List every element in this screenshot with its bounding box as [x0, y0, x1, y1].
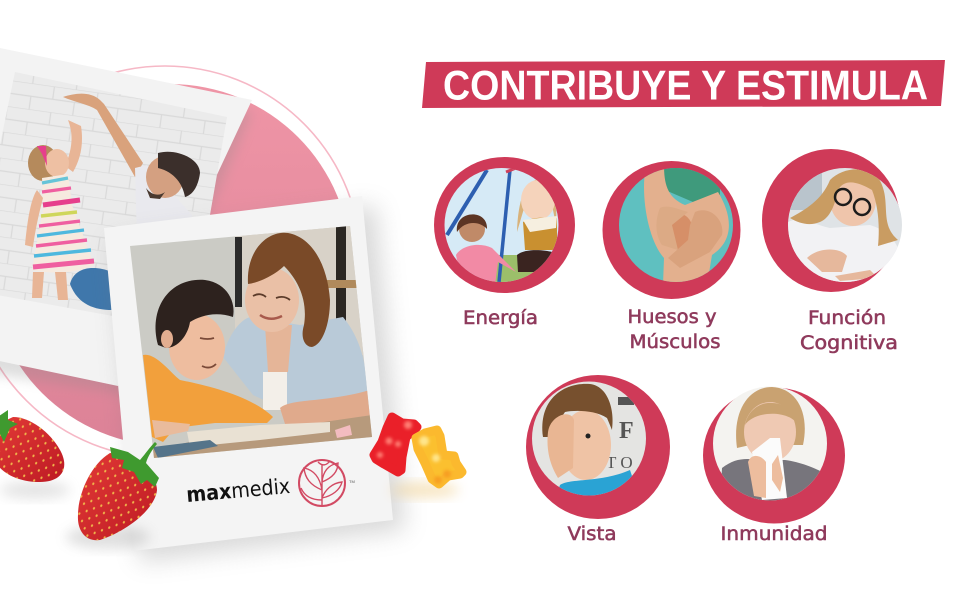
man	[63, 94, 143, 177]
item label: Huesos y Músculos: Huesos y	[628, 307, 717, 328]
item label: Energía: Energía	[463, 308, 538, 329]
item label: Vista: Vista	[568, 524, 616, 545]
gummy bears	[374, 417, 462, 498]
item: Función Cognitiva	[762, 149, 905, 292]
item: Energía	[434, 157, 575, 293]
item: Vista: F	[619, 418, 634, 444]
item label: Función Cognitiva: Función	[808, 308, 886, 329]
item label: Inmunidad: Inmunidad	[720, 524, 828, 545]
item label: Función Cognitiva	[800, 308, 898, 354]
strawberry front	[66, 442, 159, 549]
table	[153, 415, 372, 458]
boy	[143, 355, 273, 442]
book	[187, 422, 330, 444]
strawberry left	[0, 410, 70, 499]
girl	[68, 120, 82, 172]
maxmedix logo: TM	[349, 479, 355, 484]
title banner: CONTRIBUYE Y ESTIMULA	[443, 62, 928, 108]
maxmedix logo	[185, 460, 355, 507]
polaroid photo: father and daughter measuring height	[0, 47, 252, 395]
item: Vista	[526, 375, 670, 519]
item: Vista: T O	[606, 453, 633, 472]
decorative pink disc with ring	[0, 66, 361, 458]
yellow gummy	[416, 430, 462, 484]
maxmedix logo: maxmedix	[185, 474, 291, 507]
item: Inmunidad	[703, 385, 845, 524]
item label: Huesos y Músculos: Músculos	[630, 332, 720, 353]
red gummy	[374, 417, 417, 472]
item label: Huesos y Músculos	[628, 307, 720, 353]
item label: Función Cognitiva: Cognitiva	[800, 333, 898, 354]
woman	[223, 317, 367, 412]
polaroid photo: mother and son reading, with logo	[104, 196, 405, 562]
item: Huesos y Músculos	[602, 161, 740, 299]
